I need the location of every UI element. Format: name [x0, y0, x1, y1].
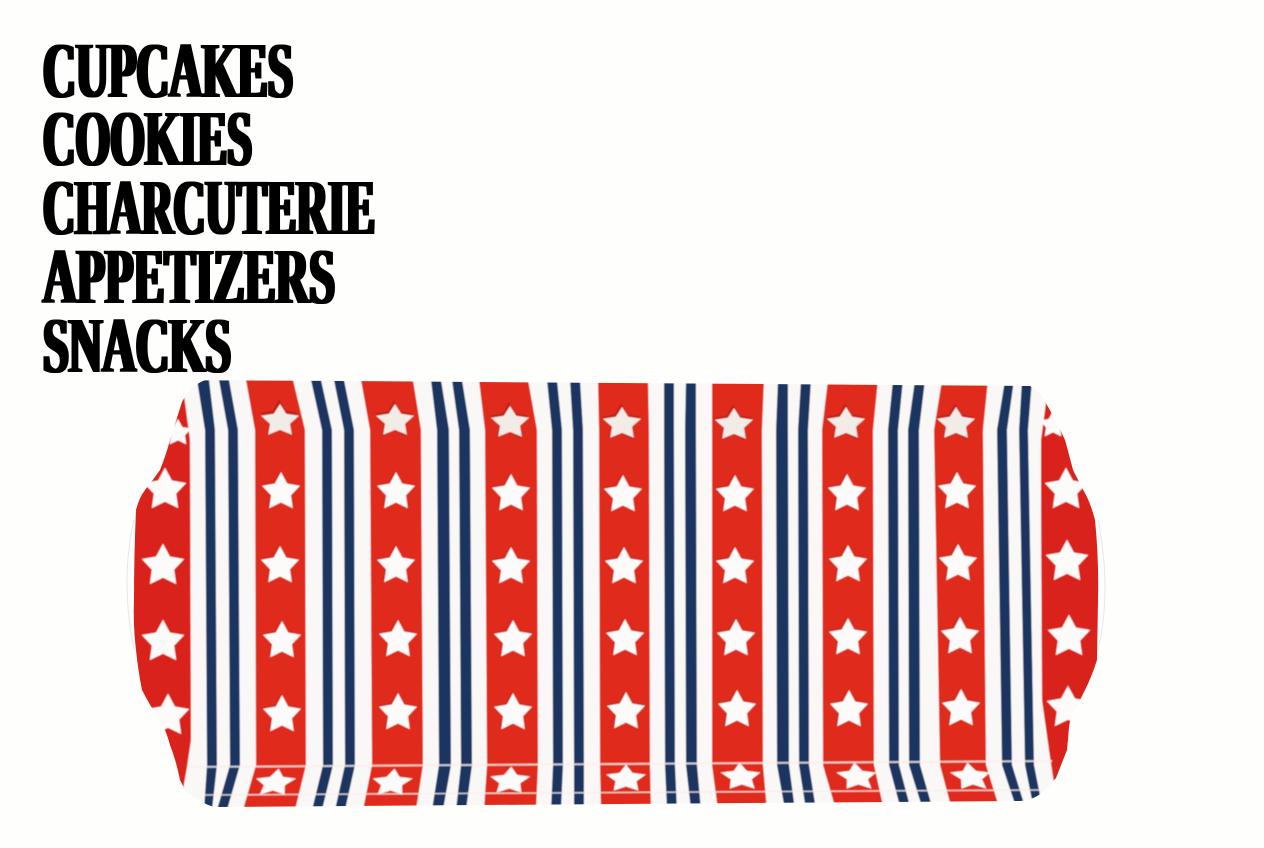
tray handle: right red	[1040, 402, 1098, 781]
white stars on red stripes	[142, 404, 1090, 795]
heading line: appetizers: APPETIZERS	[43, 234, 335, 321]
patriotic serving tray illustration	[120, 375, 1120, 815]
rim highlight lines	[190, 761, 1052, 795]
heading line: charcuterie: CHARCUTERIE	[43, 165, 375, 252]
heading line: cupcakes: CUPCAKES	[43, 28, 293, 115]
star shadows	[260, 399, 979, 730]
infographic canvas	[41, 44, 1106, 807]
left handle stars	[144, 468, 186, 508]
heading line: snacks: SNACKS	[43, 303, 231, 390]
heading line: cookies: COOKIES	[43, 96, 252, 183]
red stripes	[243, 380, 1000, 810]
heading: list of serving ideas	[43, 28, 375, 390]
tray handle: left red	[134, 397, 192, 788]
navy stripes	[197, 380, 1043, 810]
right handle stars	[1045, 468, 1087, 508]
